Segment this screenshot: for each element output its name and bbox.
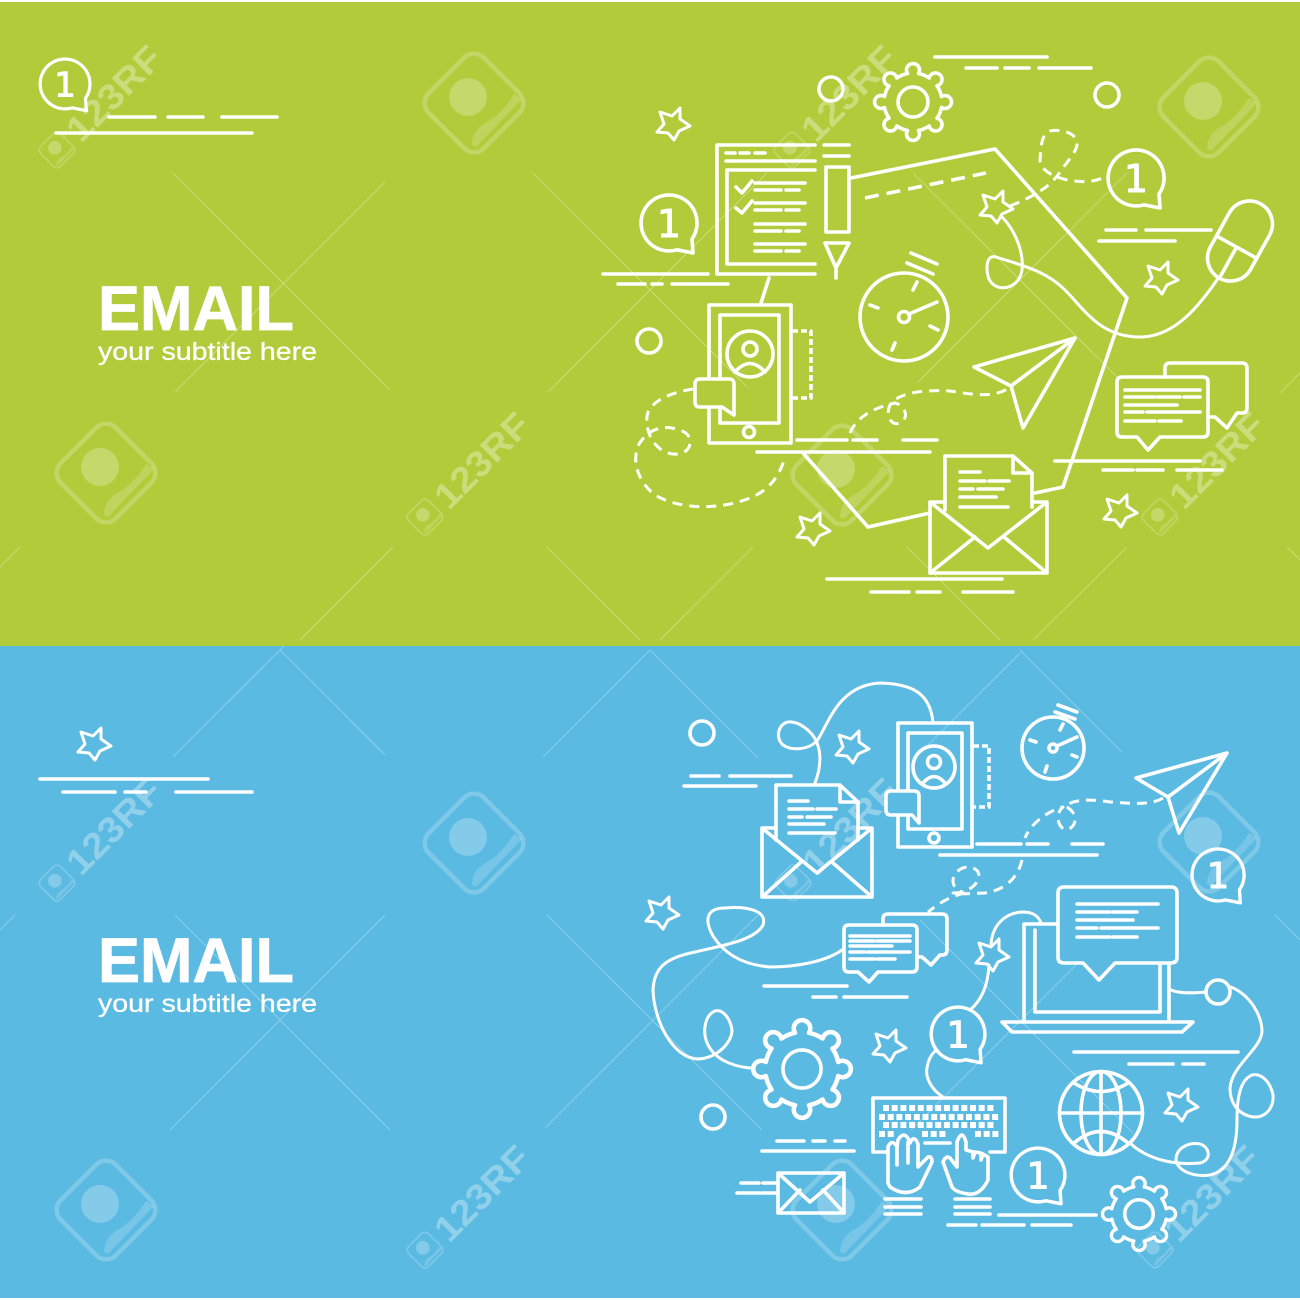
icon: stopwatch	[1022, 705, 1084, 779]
icon: laptop with message	[1002, 887, 1193, 1032]
icon: speech bubble over keyboard: 1	[946, 1013, 970, 1056]
wrist lines	[885, 1199, 990, 1214]
icon: chat bubbles	[1117, 363, 1247, 450]
icon: speech bubble right: 1	[1207, 856, 1229, 897]
watermark marks: 123RF	[794, 770, 906, 883]
icon: paper plane	[974, 338, 1075, 428]
icon: open envelope	[930, 456, 1047, 573]
lines under phone	[940, 844, 1103, 855]
lines under laptop	[1074, 1052, 1238, 1064]
icon: open envelope	[762, 785, 872, 897]
dashed line	[865, 173, 986, 198]
icon: speech bubble left	[641, 195, 697, 253]
icon: speech bubble left: 1	[657, 202, 681, 246]
watermark marks: 123RF	[426, 1137, 538, 1250]
icon: document checklist	[717, 145, 815, 274]
stars	[646, 731, 1198, 1121]
title: EMAIL	[98, 274, 294, 344]
stars	[657, 108, 1178, 545]
dashed route to plane	[928, 798, 1163, 912]
dashed route from phone	[636, 389, 785, 507]
connector polygon	[761, 149, 1127, 527]
icon: cable node with long cable	[1130, 980, 1273, 1175]
icon: speech bubble bottom	[1011, 1148, 1065, 1204]
lines under chat bubbles	[1055, 461, 1222, 470]
icon: pointing right hand	[943, 1135, 988, 1194]
subtitle: your subtitle here	[98, 990, 317, 1018]
top lines	[935, 57, 1091, 68]
icon: small circles	[637, 77, 1119, 353]
icon: phone with contact	[886, 723, 989, 847]
watermark marks: 123RF	[1156, 1137, 1268, 1250]
dashed loop to bubble	[1010, 130, 1108, 206]
lines under keyboard	[948, 1215, 1096, 1225]
title: EMAIL	[98, 926, 294, 996]
panel: green email banner	[0, 2, 1300, 646]
lines under envelope	[827, 579, 1013, 592]
panel: blue email banner	[0, 646, 1300, 1298]
cable from chat to gear	[653, 908, 842, 1068]
icon: open left hand	[888, 1135, 932, 1192]
icon: speech bubble right	[1108, 150, 1164, 208]
dashed route to plane	[850, 387, 1010, 433]
icon: small gear	[1102, 1177, 1176, 1251]
icon: pencil	[824, 145, 849, 278]
icon: small envelope with speed lines	[737, 1173, 844, 1213]
lines under chat bubbles	[764, 986, 907, 997]
icon: speech bubble bottom: 1	[1026, 1154, 1050, 1197]
lines above small envelope	[762, 1141, 854, 1151]
watermark marks: 123RF	[793, 37, 905, 150]
icon: star top left	[78, 728, 111, 760]
lines under phone	[757, 440, 937, 452]
watermark marks: 123RF	[1161, 404, 1273, 517]
icon: speech bubble over keyboard	[931, 1007, 985, 1063]
lines top	[684, 776, 791, 786]
decorative text lines top left	[40, 779, 252, 792]
subtitle: your subtitle here	[98, 338, 317, 366]
cable keyboard to bubble	[927, 912, 1041, 1097]
icon: notification bubble top left	[40, 59, 90, 111]
icon: notification bubble top left: 1	[54, 65, 76, 104]
watermark marks	[0, 37, 1300, 640]
icon: stopwatch	[860, 253, 948, 361]
cable from envelope to phone	[778, 683, 933, 783]
icon: chat bubbles	[844, 914, 947, 982]
icon: gear	[875, 64, 951, 140]
icon: phone with contact	[695, 305, 811, 443]
watermark marks: 123RF	[426, 404, 538, 517]
decorative text lines top left	[56, 117, 277, 133]
icon: paper plane	[1136, 753, 1227, 833]
icon: mouse with cable	[987, 193, 1281, 337]
watermark marks: 123RF	[58, 770, 170, 883]
small circles	[690, 721, 725, 1129]
lines under right bubble	[1099, 230, 1211, 241]
icon: globe	[1060, 1072, 1142, 1154]
watermark marks: 123RF	[58, 37, 170, 150]
lines under left bubble	[603, 274, 728, 284]
icon: speech bubble right: 1	[1124, 157, 1148, 201]
blue background	[0, 646, 1300, 1298]
icon: large gear	[753, 1020, 851, 1118]
icon: keyboard	[873, 1098, 1005, 1152]
icon: speech bubble right	[1192, 849, 1244, 903]
green background	[0, 2, 1300, 646]
watermark marks	[0, 646, 1300, 1270]
